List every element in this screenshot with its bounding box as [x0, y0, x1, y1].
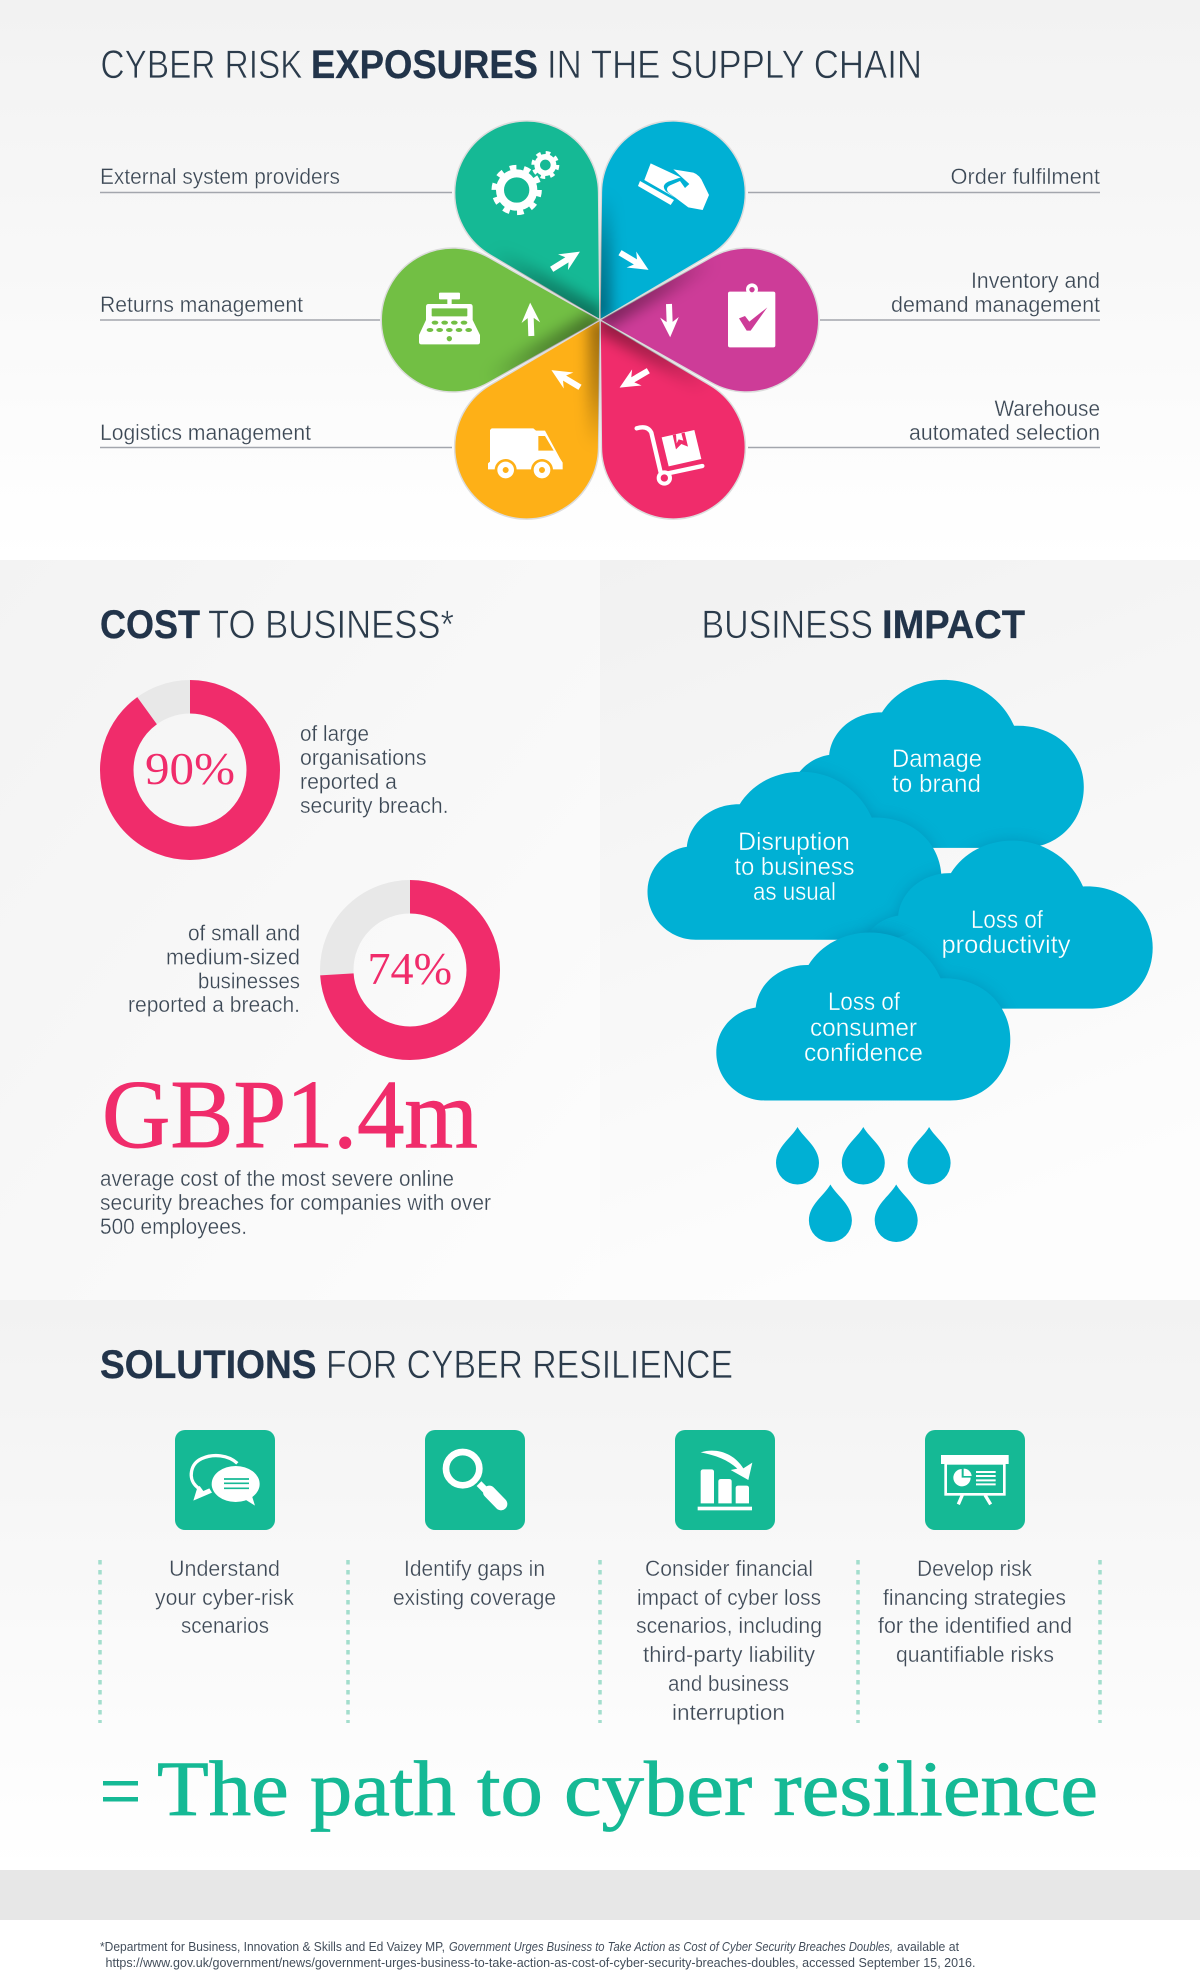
cloud: damage to brand: to brand [892, 770, 981, 798]
text: consider financial impact: Consider financial [645, 1556, 813, 1581]
cloud: loss of productivity [859, 841, 1153, 1009]
heading: solutions for cyber resilience: FOR CYBER RESILIENCE [326, 1343, 733, 1387]
text: consider financial impact: third-party liability [643, 1642, 815, 1667]
text: small and medium-sized businesses: businesses [198, 968, 300, 994]
text: large organisations: of large [300, 721, 369, 746]
text: identify gaps in existing coverage: existing coverage [393, 1585, 556, 1610]
label: order fulfilment: Order fulfilment [950, 164, 1100, 189]
heading: cost to business: COST [100, 603, 200, 647]
cloud: disruption to business as usual [648, 772, 942, 940]
cloud: disruption to business as usual: to business [734, 853, 854, 881]
flower diagram [380, 120, 820, 520]
icon: presentation board [925, 1430, 1025, 1530]
cloud: loss of consumer confidence: confidence [804, 1039, 923, 1067]
cloud: damage to brand: Damage [892, 745, 982, 773]
footnote: Government Urges Business to Take Action as Cost of Cyber Security Breaches Doubles, [449, 1939, 893, 1954]
conclusion: the path to cyber resilience: The path to cyber resilience [157, 1745, 1098, 1832]
label: warehouse automated selection: Warehouse [994, 396, 1100, 421]
text: develop risk financing strategies: Develop risk [917, 1556, 1033, 1581]
label: inventory and demand management [820, 268, 1100, 320]
panel: cyber risk exposures [0, 0, 1200, 560]
text: identify gaps in existing coverage: Identify gaps in [404, 1556, 545, 1581]
cloud: loss of productivity: Loss of [971, 906, 1043, 934]
text: consider financial impact [636, 1556, 822, 1725]
icon: card and hand [638, 163, 709, 210]
title: cyber risk exposures: IN THE SUPPLY CHAIN [547, 43, 922, 87]
label: external system providers: External system providers [100, 164, 340, 189]
title: cyber risk exposures: EXPOSURES [311, 43, 538, 87]
text: large organisations: security breach. [300, 793, 448, 818]
heading: solutions for cyber resilience: SOLUTIONS [100, 1343, 316, 1387]
text: average cost description: 500 employees. [100, 1214, 247, 1239]
text: develop risk financing strategies [878, 1556, 1072, 1667]
petal: yellow [454, 318, 601, 520]
text: average cost description: security breaches for companies with over [100, 1190, 491, 1215]
cloud: loss of consumer confidence [716, 932, 1010, 1100]
arrow: yellow to green [547, 362, 585, 395]
icon: clipboard [728, 283, 775, 347]
text: consider financial impact: impact of cyber loss [637, 1585, 821, 1610]
footnote [100, 1939, 976, 1970]
panel: cost to business [0, 560, 600, 1300]
text: consider financial impact: and business [668, 1671, 789, 1696]
text: small and medium-sized businesses: of small and [188, 920, 300, 946]
text: understand your cyber-risk scenarios: Understand [169, 1556, 280, 1581]
label: returns management: Returns management [100, 292, 303, 317]
label: warehouse automated selection [748, 396, 1100, 448]
footnote: *Department for Business, Innovation & Skills and Ed Vaizey MP, [100, 1939, 445, 1954]
text: understand your cyber-risk scenarios: scenarios [181, 1613, 269, 1638]
cloud: disruption to business as usual: as usual [753, 878, 836, 906]
text: understand your cyber-risk scenarios: your cyber-risk [155, 1585, 295, 1610]
text: understand your cyber-risk scenarios [155, 1556, 295, 1638]
icon: hand cart with box [637, 427, 702, 484]
text: consider financial impact: scenarios, including [636, 1613, 822, 1638]
donut chart: 74% [337, 897, 483, 1043]
text: consider financial impact: interruption [672, 1700, 785, 1725]
heading: cost to business [100, 603, 454, 647]
title: cyber risk exposures: CYBER RISK [100, 43, 303, 87]
icon: delivery truck [488, 428, 563, 481]
arrow: blue to magenta [615, 245, 653, 278]
petal: green [381, 248, 600, 392]
cloud: loss of productivity: productivity [942, 931, 1071, 959]
label: logistics management: Logistics management [100, 420, 311, 445]
heading: cost to business: TO BUSINESS* [208, 603, 454, 647]
big figure: GBP1.4m: GBP1.4m [102, 1061, 478, 1168]
cloud: loss of consumer confidence: Loss of [828, 988, 900, 1016]
text: small and medium-sized businesses: reported a breach. [128, 992, 300, 1017]
footnote: https://www.gov.uk/government/news/government-urges-business-to-take-action-as-cost-of-cyber-security-breaches-doubles, accessed September 15, 2016. [106, 1955, 976, 1970]
icon: gears [494, 153, 558, 213]
petal: teal [454, 120, 600, 319]
text: develop risk financing strategies: for the identified and [878, 1613, 1072, 1638]
heading: business impact: IMPACT [882, 603, 1025, 647]
label: inventory and demand management: demand management [891, 292, 1100, 317]
heading: solutions for cyber resilience [100, 1343, 733, 1387]
text: small and medium-sized businesses: medium-sized [166, 944, 300, 970]
label: warehouse automated selection: automated selection [909, 420, 1100, 445]
heading: business impact: BUSINESS [702, 603, 873, 647]
petal: blue [599, 120, 746, 319]
cloud: damage to brand [790, 680, 1084, 848]
arrow: teal to blue [547, 244, 585, 277]
arrow: magenta to pink [660, 304, 679, 338]
text: large organisations: reported a [300, 769, 398, 794]
donut chart: 90% [117, 697, 263, 843]
arrow: pink to yellow [615, 363, 653, 396]
text: identify gaps in existing coverage [393, 1556, 556, 1610]
cloud: loss of consumer confidence: consumer [810, 1014, 917, 1042]
donut chart: 74%: 74% [368, 943, 452, 994]
text: average cost description: average cost of the most severe online [100, 1166, 454, 1191]
text: average cost description [100, 1166, 491, 1239]
petal: magenta [600, 248, 819, 392]
heading: business impact [702, 603, 1025, 647]
footnote: available at [897, 1939, 959, 1954]
icon: rain drops [776, 1127, 951, 1242]
text: develop risk financing strategies: financing strategies [883, 1585, 1066, 1610]
text: small and medium-sized businesses [128, 920, 300, 1017]
text: develop risk financing strategies: quantifiable risks [896, 1642, 1054, 1667]
text: large organisations [300, 721, 448, 818]
icon: magnifying glass [425, 1430, 525, 1530]
icon: falling bar chart [675, 1430, 775, 1530]
label: inventory and demand management: Inventory and [971, 268, 1100, 293]
footer band [0, 1870, 1200, 1920]
cloud: disruption to business as usual: Disruption [738, 828, 850, 856]
panel: business impact [600, 560, 1200, 1300]
icon: cash register [419, 293, 480, 344]
petal: pink [600, 320, 746, 520]
text: large organisations: organisations [300, 745, 426, 770]
icon: speech bubbles [175, 1430, 275, 1530]
donut chart: 90%: 90% [145, 743, 235, 794]
panel: solutions for cyber resilience [0, 1300, 1200, 1870]
arrow: green to teal [521, 302, 541, 336]
title: cyber risk exposures [100, 43, 922, 87]
